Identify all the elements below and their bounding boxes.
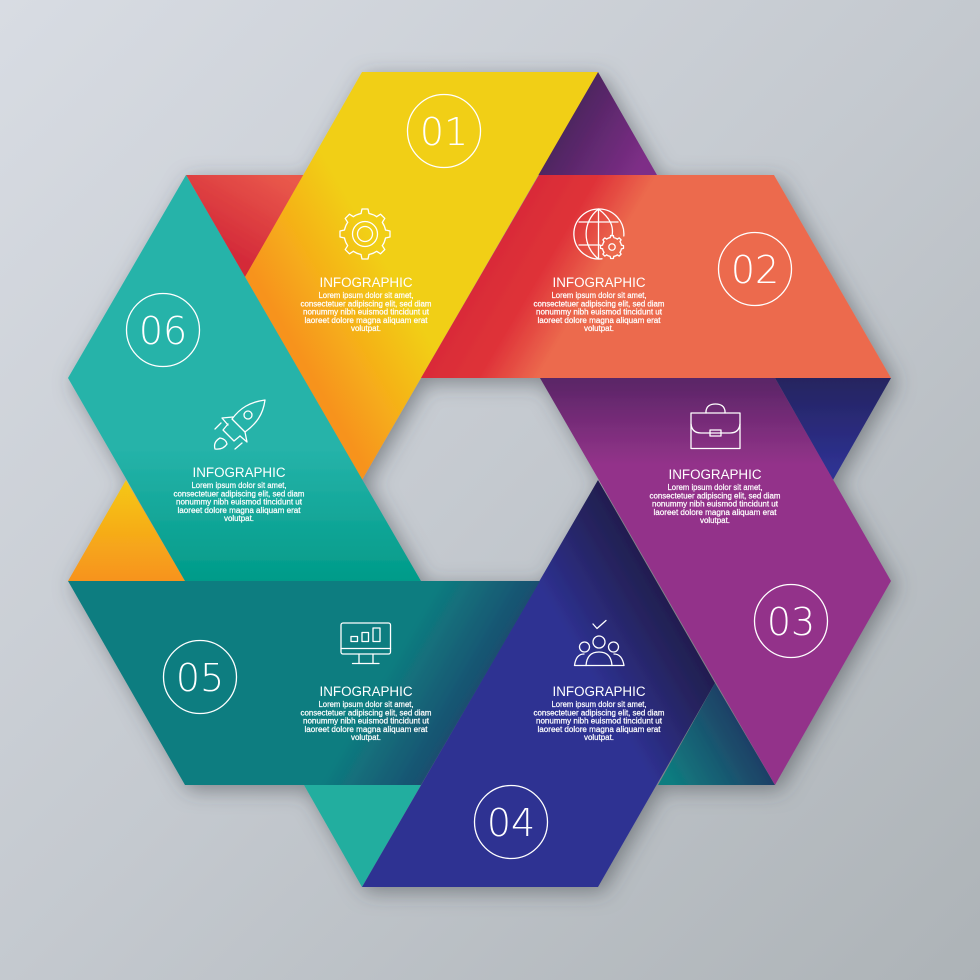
heading and body text: laoreet dolore magna aliquam erat [538, 316, 661, 325]
heading and body text: consectetuer adipiscing elit, sed diam [174, 489, 305, 498]
panel 04 band: navy [362, 480, 715, 887]
fold triangle: dark teal [658, 683, 775, 785]
heading and body text: INFOGRAPHIC [320, 275, 413, 290]
heading and body text: laoreet dolore magna aliquam erat [538, 725, 661, 734]
number badge 05 [164, 640, 236, 714]
heading and body text: laoreet dolore magna aliquam erat [304, 725, 428, 734]
fold triangle: orange [68, 480, 185, 581]
folded hexagon ribbon [68, 72, 891, 887]
heading and body text: nonummy nibh euismod tincidunt ut [536, 308, 663, 317]
heading and body text: volutpat. [224, 514, 254, 523]
heading and body text: laoreet dolore magna aliquam erat [304, 316, 428, 325]
heading and body text: volutpat. [351, 733, 381, 742]
heading and body text [650, 467, 781, 525]
heading and body text [300, 684, 432, 742]
panel 06 band: teal [68, 175, 421, 581]
heading and body text [300, 275, 432, 333]
heading and body text: consectetuer adipiscing elit, sed diam [300, 299, 432, 308]
icon: team with check [574, 620, 624, 666]
number badge 06: 06 [139, 309, 187, 353]
heading and body text [534, 275, 665, 333]
number badge 05: 05 [176, 656, 224, 700]
icon: globe with gear [574, 209, 624, 259]
heading and body text: consectetuer adipiscing elit, sed diam [534, 708, 665, 717]
heading and body text: INFOGRAPHIC [320, 684, 413, 699]
heading and body text: Lorem ipsum dolor sit amet, [318, 700, 414, 709]
heading and body text: Lorem ipsum dolor sit amet, [552, 291, 646, 300]
number badge 01 [408, 94, 480, 168]
heading and body text [534, 684, 665, 742]
number badge 04 [474, 786, 548, 858]
number badge 03: 03 [767, 600, 815, 644]
heading and body text: volutpat. [351, 324, 381, 333]
heading and body text: consectetuer adipiscing elit, sed diam [300, 708, 432, 717]
fold triangle: navy [775, 378, 891, 480]
fold triangle: red [186, 175, 304, 277]
heading and body text: volutpat. [700, 516, 730, 525]
heading and body text: nonummy nibh euismod tincidunt ut [303, 308, 430, 317]
number badge 03 [754, 584, 828, 658]
heading and body text: nonummy nibh euismod tincidunt ut [303, 717, 430, 726]
panel 03 content [650, 404, 828, 658]
heading and body text: INFOGRAPHIC [668, 467, 762, 482]
heading and body text: INFOGRAPHIC [552, 684, 646, 699]
panel 05 content [164, 623, 432, 742]
heading and body text: nonummy nibh euismod tincidunt ut [176, 498, 303, 507]
panel 01 content [300, 94, 480, 333]
panel 01 band: yellow [245, 72, 598, 480]
heading and body text: Lorem ipsum dolor sit amet, [668, 483, 762, 492]
heading and body text [174, 465, 305, 523]
heading and body text: consectetuer adipiscing elit, sed diam [650, 491, 781, 500]
heading and body text: laoreet dolore magna aliquam erat [654, 508, 777, 517]
heading and body text: Lorem ipsum dolor sit amet, [318, 291, 414, 300]
fold triangle: teal [304, 785, 421, 887]
fold triangle: purple [538, 72, 657, 175]
icon: rocket [215, 400, 265, 449]
heading and body text: INFOGRAPHIC [552, 275, 646, 290]
panel 05 band: dark teal [68, 581, 540, 785]
heading and body text: consectetuer adipiscing elit, sed diam [534, 299, 665, 308]
heading and body text: Lorem ipsum dolor sit amet, [552, 700, 646, 709]
number badge 01: 01 [420, 110, 468, 154]
heading and body text: nonummy nibh euismod tincidunt ut [652, 500, 779, 509]
heading and body text: volutpat. [584, 324, 614, 333]
heading and body text: INFOGRAPHIC [192, 465, 286, 480]
heading and body text: volutpat. [584, 733, 614, 742]
panel 02 content [534, 209, 792, 333]
icon: monitor with bar chart [341, 623, 390, 664]
number badge 02 [718, 232, 792, 306]
number badge 06 [126, 294, 200, 366]
icon: briefcase [691, 404, 740, 448]
icon: gear [339, 208, 391, 260]
panel 02 band: coral [421, 175, 891, 378]
number badge 04: 04 [487, 801, 535, 845]
panel 06 content [126, 294, 305, 523]
heading and body text: nonummy nibh euismod tincidunt ut [536, 717, 663, 726]
panel 03 band: purple [540, 378, 891, 785]
number badge 02: 02 [731, 248, 779, 292]
panel 04 content [474, 620, 665, 858]
heading and body text: laoreet dolore magna aliquam erat [178, 506, 301, 515]
heading and body text: Lorem ipsum dolor sit amet, [192, 481, 286, 490]
